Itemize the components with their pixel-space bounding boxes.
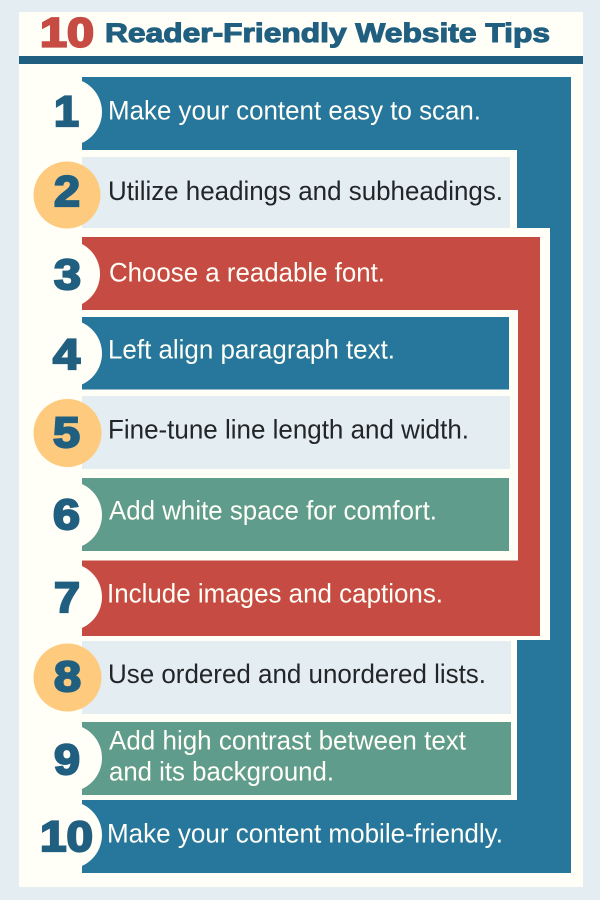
panel: red frame: [82, 237, 540, 636]
tip 5 text: Fine-tune line length and width.: [108, 414, 469, 444]
panel: tip 9 background: [82, 722, 511, 795]
tip 7 text: Include images and captions.: [107, 578, 443, 608]
number 1: 1: [54, 88, 79, 136]
tip 6 text: Add white space for comfort.: [109, 496, 437, 526]
number 4: 4: [53, 331, 80, 379]
number 3: 3: [54, 251, 81, 299]
icon: orange circles: [34, 162, 102, 712]
number 8: 8: [54, 653, 81, 701]
left margin cover: [19, 64, 82, 887]
tip 9 text: Add high contrast between text: [109, 726, 467, 756]
tip 9 text: [109, 726, 467, 786]
title: 10: [40, 10, 94, 56]
tip 1 text: Make your content easy to scan.: [108, 96, 481, 126]
tip 8 text: Use ordered and unordered lists.: [108, 659, 486, 689]
tip 10 text: Make your content mobile-friendly.: [107, 818, 503, 848]
panel: cream gap around tips 8 and 9: [82, 636, 517, 800]
panel: cream gap around tip 2: [82, 150, 517, 237]
title: Reader-Friendly Website Tips: [105, 18, 550, 48]
panel: tip 2 background: [82, 157, 510, 230]
panel: tip 6 background: [82, 478, 509, 551]
panel: outer blue frame: [82, 77, 571, 873]
number 10: 10: [40, 813, 93, 861]
icon: cream notches: [32, 78, 102, 869]
panel: cream frame around red block: [82, 228, 550, 640]
panel: cream gap around tips 4 to 6: [82, 310, 518, 560]
tip 2 text: Utilize headings and subheadings.: [108, 176, 503, 206]
tip 4 text: Left align paragraph text.: [108, 334, 395, 364]
number 6: 6: [53, 491, 80, 539]
panel: tip 4 background: [82, 317, 509, 390]
number 2: 2: [54, 168, 80, 216]
header rule: [19, 56, 583, 64]
number 7: 7: [54, 574, 80, 622]
tip 3 text: Choose a readable font.: [109, 258, 385, 288]
number 5: 5: [53, 409, 80, 457]
panel: tip 5 background: [82, 396, 510, 469]
tip 9 text: and its background.: [109, 756, 334, 786]
panel: tip 8 background: [82, 641, 511, 714]
title: [40, 10, 550, 56]
number 9: 9: [54, 736, 80, 784]
